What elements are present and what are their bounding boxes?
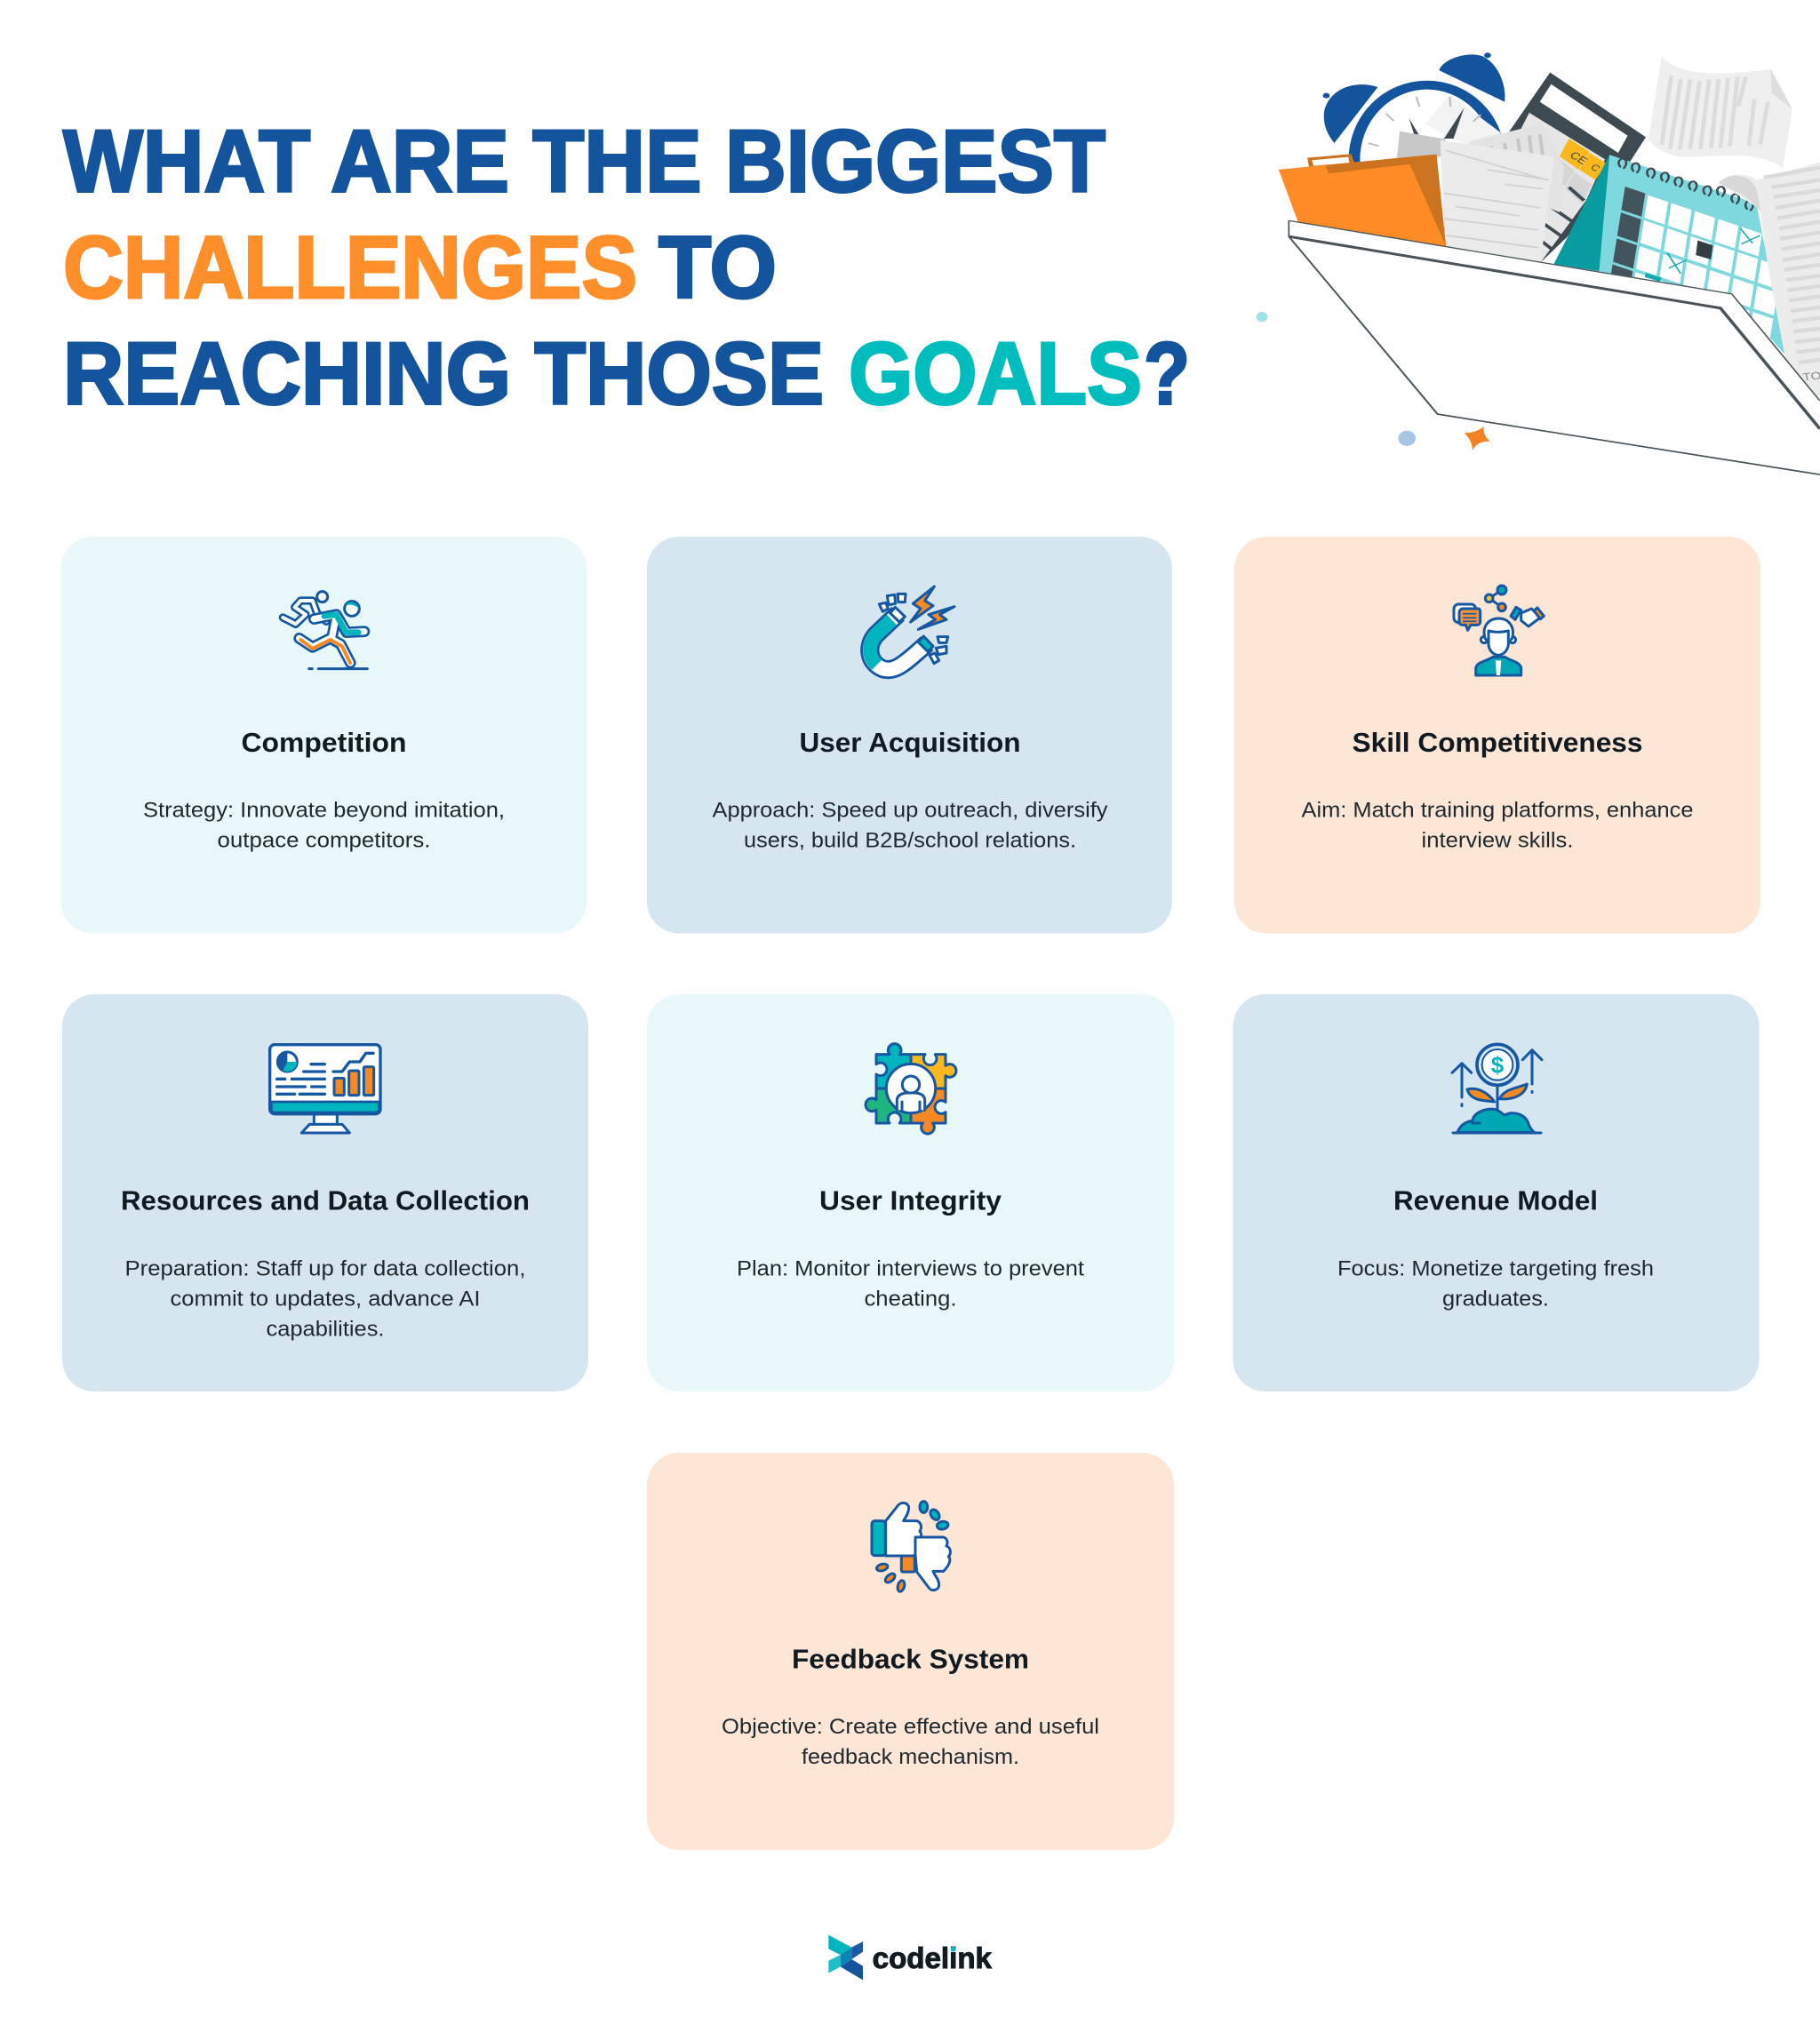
- heading: Feedback System: [792, 1644, 1029, 1674]
- title: WHAT ARE THE BIGGEST: [63, 112, 1106, 210]
- title: [63, 112, 1190, 423]
- description: capabilities.: [267, 1317, 384, 1342]
- heading: Revenue Model: [1393, 1185, 1598, 1216]
- icon: person with network: [1454, 586, 1544, 675]
- description: Preparation: Staff up for data collection,: [124, 1256, 526, 1281]
- folder tab: [1307, 154, 1355, 171]
- illustration: overflowing folder: [1257, 52, 1820, 474]
- panel: revenue model: [1233, 994, 1760, 1391]
- title: CHALLENGES: [63, 218, 637, 316]
- title: ?: [1144, 323, 1190, 423]
- description: [1301, 798, 1694, 853]
- description: Objective: Create effective and useful: [722, 1715, 1099, 1739]
- description: [1337, 1256, 1654, 1312]
- panel: resources and data collection: [62, 994, 588, 1391]
- description: Strategy: Innovate beyond imitation,: [143, 798, 505, 823]
- alarm clock: [1323, 52, 1505, 234]
- panel: competition: [60, 537, 587, 933]
- description: cheating.: [864, 1287, 956, 1312]
- open folder front: [1289, 220, 1820, 474]
- description: graduates.: [1442, 1287, 1549, 1312]
- description: outpace competitors.: [217, 828, 430, 853]
- panel: user integrity: [647, 994, 1174, 1391]
- icon: monitor dashboard: [270, 1045, 380, 1133]
- title: REACHING THOSE: [63, 323, 824, 423]
- description: commit to updates, advance AI: [171, 1287, 480, 1312]
- icon: puzzle with user: [866, 1044, 956, 1134]
- teal calendar cover: [1553, 155, 1609, 271]
- heading: Resources and Data Collection: [121, 1185, 530, 1216]
- panel: user acquisition: [647, 537, 1172, 933]
- icon: money plant: [1452, 1044, 1542, 1133]
- calculator: C: [1588, 163, 1601, 174]
- heading: User Integrity: [819, 1185, 1002, 1216]
- icon: money plant: $: [1491, 1052, 1505, 1079]
- logo mark: [828, 1935, 863, 1980]
- flying paper: [1648, 56, 1792, 168]
- calendar: [1600, 155, 1786, 356]
- title: GOALS: [849, 323, 1142, 423]
- description: interview skills.: [1422, 828, 1573, 853]
- decorative dots: [1257, 312, 1490, 450]
- panel: feedback system: [647, 1453, 1174, 1850]
- description: [737, 1256, 1084, 1312]
- logo: codelink: [828, 1935, 992, 1980]
- description: Approach: Speed up outreach, diversify: [713, 798, 1107, 823]
- description: [124, 1256, 526, 1342]
- description: [713, 798, 1107, 853]
- description: Aim: Match training platforms, enhance: [1301, 798, 1694, 823]
- description: [722, 1715, 1099, 1769]
- icon: thumbs up and down: [872, 1502, 950, 1592]
- description: Focus: Monetize targeting fresh: [1337, 1256, 1654, 1281]
- heading: User Acquisition: [800, 727, 1020, 758]
- wordmark: codelink: [873, 1942, 992, 1975]
- heading: Skill Competitiveness: [1353, 727, 1642, 758]
- description: Plan: Monitor interviews to prevent: [737, 1256, 1084, 1281]
- heading: Competition: [242, 727, 407, 758]
- description: [143, 798, 505, 853]
- orange folder: [1279, 155, 1446, 246]
- panel: skill competitiveness: [1234, 537, 1760, 933]
- icon: magnet: [870, 586, 954, 670]
- stack of papers: [1397, 124, 1564, 262]
- receipt paper: [1719, 163, 1820, 410]
- description: feedback mechanism.: [802, 1745, 1019, 1769]
- calculator: CE: [1567, 149, 1591, 167]
- calculator: [1508, 72, 1646, 262]
- title: TO: [659, 218, 777, 316]
- description: users, build B2B/school relations.: [744, 828, 1076, 853]
- icon: runners: [283, 592, 367, 669]
